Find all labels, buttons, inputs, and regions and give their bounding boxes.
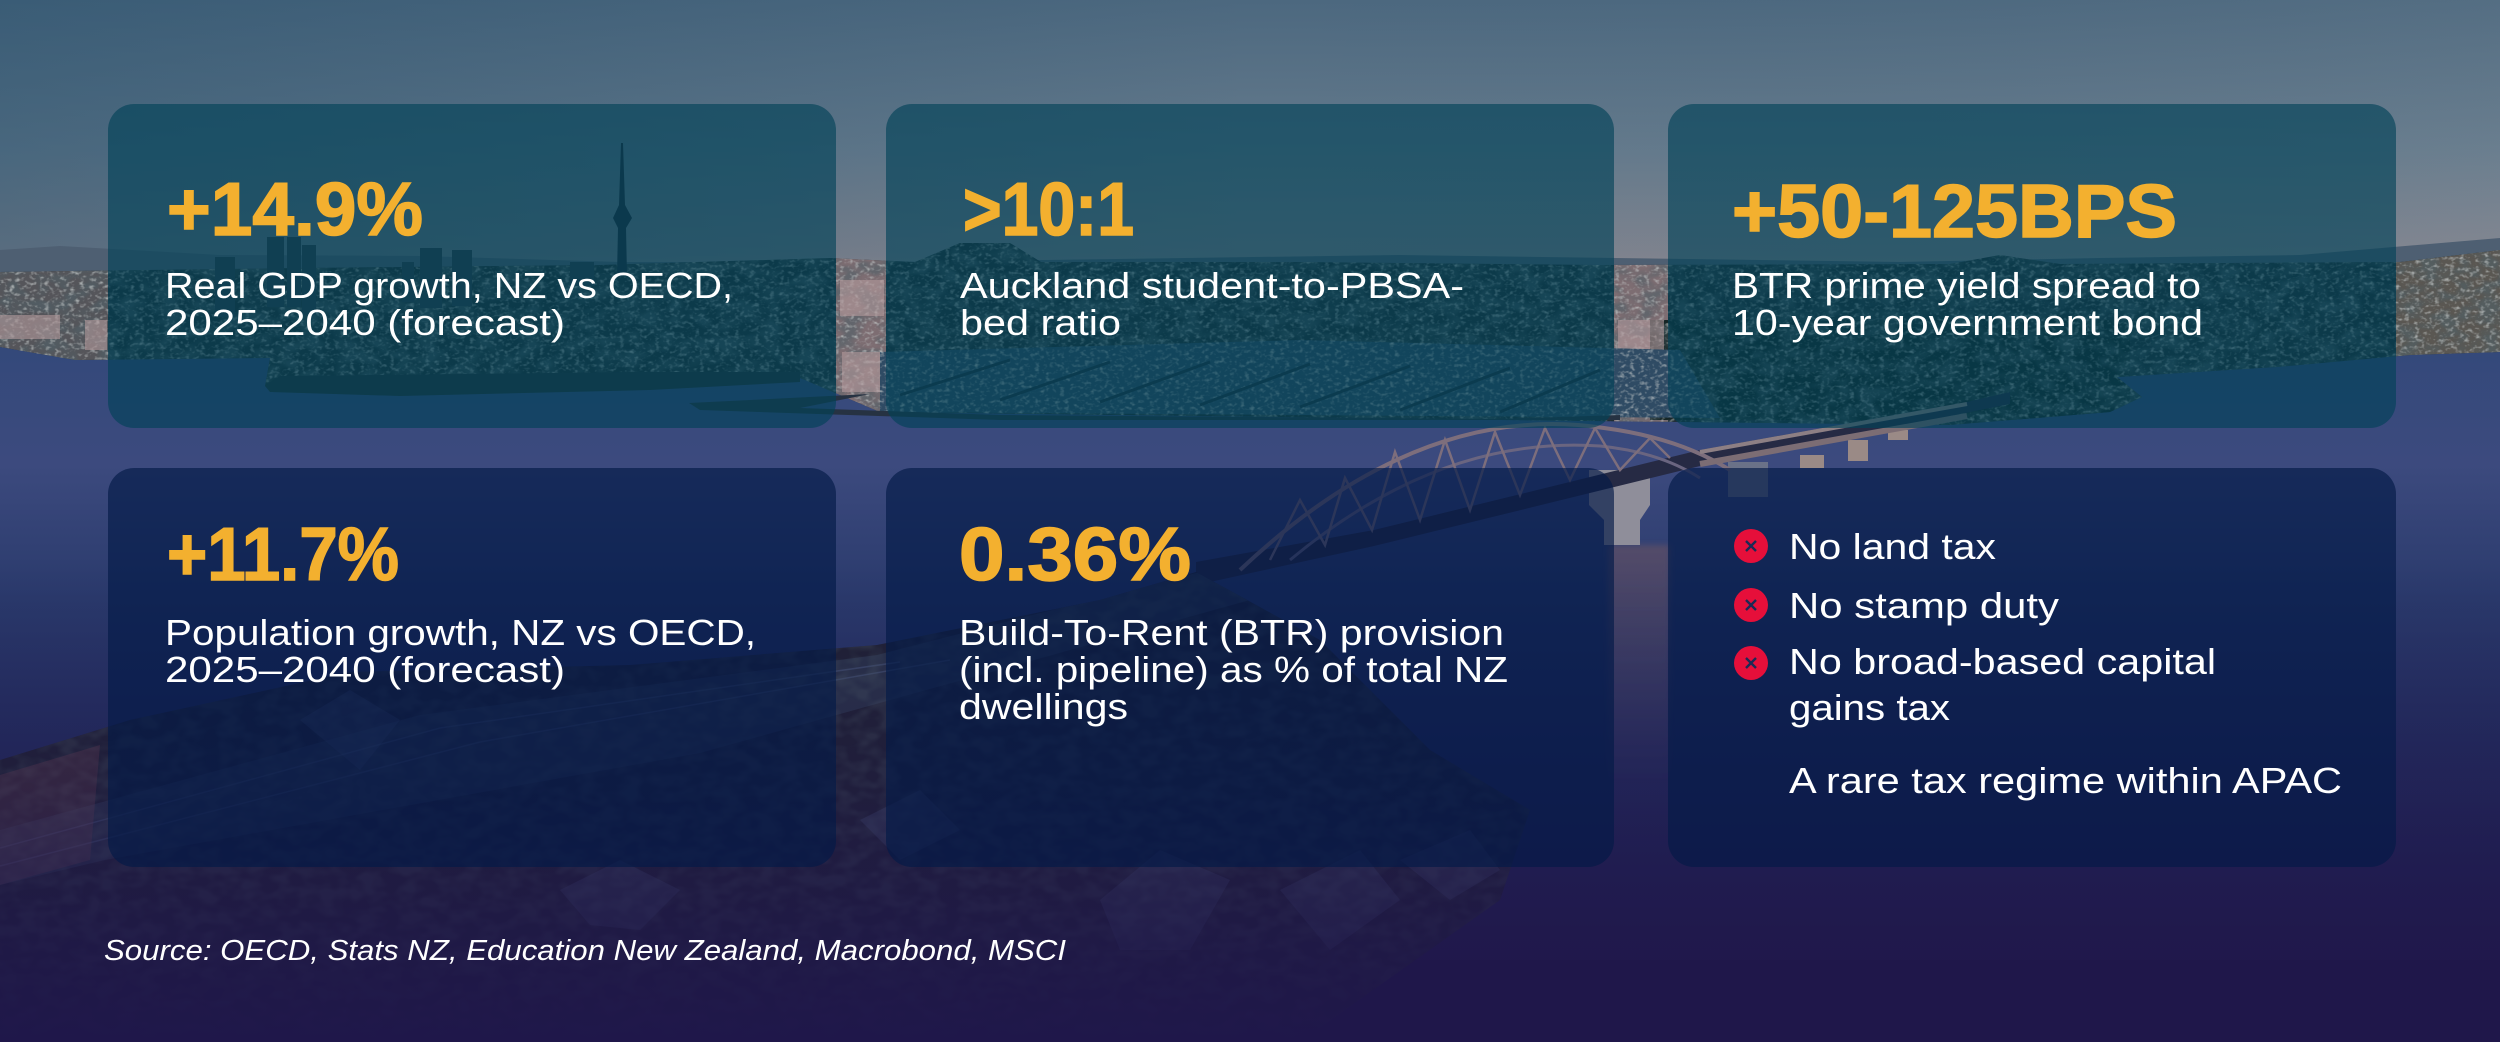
CBD buildings bbox=[215, 237, 594, 317]
description: Real GDP growth, NZ vs OECD, bbox=[165, 265, 733, 306]
water bbox=[0, 340, 2500, 960]
stat: 0.36%: 0.36% bbox=[959, 512, 1191, 596]
icon: red cross, stamp duty bbox=[1734, 588, 1768, 622]
description: (incl. pipeline) as % of total NZ bbox=[959, 649, 1508, 690]
description: bed ratio bbox=[960, 302, 1121, 343]
list item: no stamp duty: No stamp duty bbox=[1789, 585, 2059, 626]
Harbour Bridge bbox=[1196, 392, 2010, 585]
sky bbox=[0, 0, 2500, 300]
description: 10-year government bond bbox=[1732, 302, 2203, 343]
wharf bbox=[265, 372, 800, 396]
bright waterfront buildings bbox=[0, 280, 1666, 415]
icon: red cross, capital gains tax bbox=[1734, 646, 1768, 680]
Sky Tower bbox=[613, 143, 632, 275]
distant hills bbox=[0, 238, 2500, 290]
icon: red cross, land tax bbox=[1734, 529, 1768, 563]
source note: Source: OECD, Stats NZ, Education New Zealand, Macrobond, MSCI bbox=[104, 935, 1066, 967]
breakwater bbox=[689, 394, 1620, 420]
panel: BTR yield spread bbox=[1668, 104, 2396, 428]
description: dwellings bbox=[959, 686, 1128, 727]
description: Auckland student-to-PBSA- bbox=[960, 265, 1464, 306]
city and North Shore land bbox=[0, 240, 2500, 430]
bridge piers bbox=[1589, 430, 1908, 545]
foreground purple fade bbox=[0, 560, 2500, 1042]
description: 2025–2040 (forecast) bbox=[165, 302, 565, 343]
list item: no land tax: No land tax bbox=[1789, 526, 1996, 567]
list item: no broad-based capital gains tax: gains tax bbox=[1789, 687, 1950, 728]
foreground land with motorway and houses bbox=[0, 572, 1514, 938]
stat: +50-125BPS: +50-125BPS bbox=[1732, 169, 2177, 253]
description: Build-To-Rent (BTR) provision bbox=[959, 612, 1504, 653]
description: Population growth, NZ vs OECD, bbox=[165, 612, 756, 653]
stat: +11.7%: +11.7% bbox=[167, 512, 399, 596]
list item: no broad-based capital gains tax: No broad-based capital bbox=[1789, 641, 2216, 682]
stat: >10:1: >10:1 bbox=[963, 167, 1134, 251]
description: 2025–2040 (forecast) bbox=[165, 649, 565, 690]
panel: real GDP growth bbox=[108, 104, 836, 428]
panel: student-to-PBSA ratio bbox=[886, 104, 1614, 428]
panel: population growth bbox=[108, 468, 836, 867]
marina bbox=[880, 340, 1720, 418]
description: BTR prime yield spread to bbox=[1732, 265, 2201, 306]
panel: BTR provision bbox=[886, 468, 1614, 867]
closing statement: A rare tax regime within APAC bbox=[1789, 760, 2342, 801]
pier reflection bbox=[1608, 545, 1670, 785]
stat: +14.9%: +14.9% bbox=[167, 167, 423, 251]
panel: tax regime bbox=[1668, 468, 2396, 867]
